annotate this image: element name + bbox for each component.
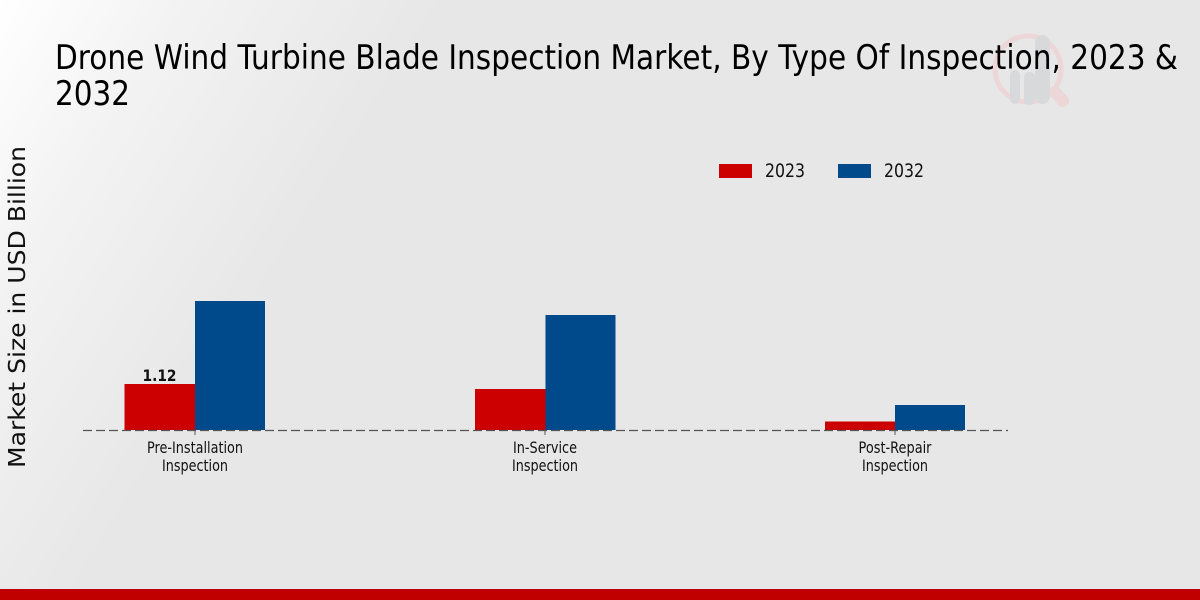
x-axis baseline (83, 430, 1008, 432)
footer bar (0, 589, 1200, 600)
category label: Pre-Installation Inspection: Pre-Installation (147, 438, 243, 457)
icon: watermark magnifier with bars (995, 35, 1063, 105)
category label: Post-Repair Inspection: Post-Repair (858, 438, 932, 457)
axis ticks (195, 430, 895, 435)
bars: Pre-Installation Inspection (124, 301, 265, 430)
category label: Post-Repair Inspection (858, 438, 932, 475)
category label: Pre-Installation Inspection (147, 438, 243, 475)
category label: In-Service Inspection (512, 438, 578, 475)
category label: Post-Repair Inspection: Inspection (862, 456, 928, 475)
legend item: 2032 (838, 160, 924, 182)
legend item: 2032: 2032 (884, 160, 924, 182)
legend item: 2023: 2023 (765, 160, 805, 182)
category label: Pre-Installation Inspection: Inspection (162, 456, 228, 475)
title: 2032 (55, 74, 130, 113)
y-axis title: Market Size in USD Billion (5, 146, 31, 468)
legend (719, 160, 924, 182)
bars: Post-Repair Inspection (825, 405, 965, 430)
value label: 1.12 (142, 366, 176, 385)
bar chart (83, 301, 1008, 475)
legend item: 2023 (719, 160, 805, 182)
category label: In-Service Inspection: In-Service (513, 438, 577, 457)
title (55, 38, 1178, 113)
bars: In-Service Inspection (475, 315, 616, 430)
category label: In-Service Inspection: Inspection (512, 456, 578, 475)
